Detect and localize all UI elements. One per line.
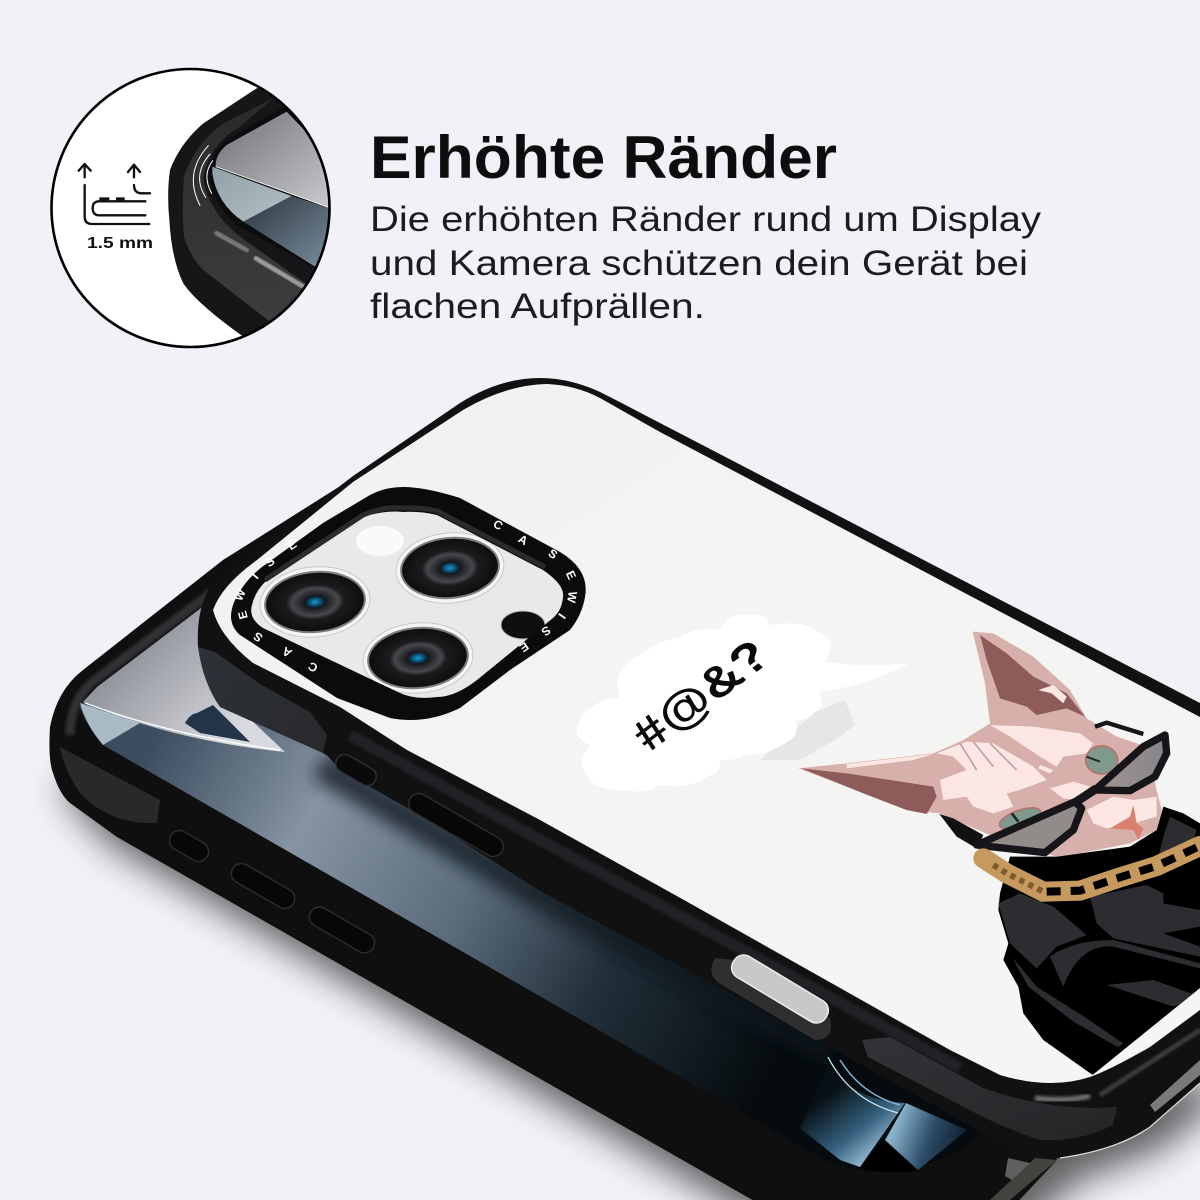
lens 2 — [393, 528, 507, 608]
tongue — [1110, 805, 1143, 840]
front phone: black bumper — [198, 378, 1200, 1158]
ring lettering: S — [251, 629, 265, 645]
back phone: translucent corner — [60, 747, 160, 823]
ring inner bevel — [265, 508, 545, 580]
inset phone corner — [79, 60, 340, 360]
ring lettering: A — [516, 532, 531, 548]
ring lettering: E — [563, 568, 579, 582]
camera module — [231, 487, 586, 720]
camera plate — [249, 510, 565, 700]
ring lettering: C — [305, 659, 320, 675]
flash — [356, 526, 404, 556]
sweater — [998, 807, 1200, 1077]
front phone: speaker port — [1150, 1060, 1200, 1112]
bubble text: #@&? — [620, 631, 781, 759]
front phone: corner highlights — [1035, 1096, 1090, 1100]
1.5 mm label: 1.5 mm — [87, 235, 153, 252]
ring lettering: E — [235, 609, 251, 621]
ring lettering: E — [285, 537, 299, 553]
skin highlights — [847, 685, 1157, 828]
description text: und Kamera schützen dein Gerät bei — [370, 244, 1028, 283]
description text — [370, 200, 1042, 326]
impact arcs — [193, 146, 213, 205]
ring lettering: S — [262, 554, 278, 570]
head — [798, 632, 1162, 857]
inset circle: raised edge detail — [52, 60, 340, 360]
title: Erhöhte Ränder — [370, 124, 837, 191]
gold chain — [983, 846, 1200, 892]
ring lettering: S — [546, 546, 560, 562]
camera ring — [231, 487, 586, 720]
ring lettering: A — [279, 644, 294, 660]
ring lettering: E — [517, 639, 531, 655]
charging port — [711, 951, 832, 1040]
edge height icon — [79, 164, 150, 224]
front phone: translucent corner top left — [198, 647, 327, 753]
eyes — [997, 746, 1118, 833]
back phone: bumper sheen — [70, 590, 215, 735]
ring lettering — [231, 517, 580, 675]
cat illustration — [798, 632, 1200, 1077]
front phone — [198, 378, 1200, 1158]
power button — [405, 790, 507, 860]
inset circle outline — [52, 69, 330, 347]
cloud shadow — [760, 700, 855, 760]
ring lettering: C — [491, 517, 506, 533]
ring lettering: S — [539, 623, 553, 639]
lens 1 — [257, 562, 373, 642]
ring lettering: I — [555, 611, 569, 621]
screen shade under front phone — [320, 765, 830, 1052]
ring lettering: W — [564, 590, 580, 604]
description text: flachen Aufprällen. — [370, 287, 705, 326]
back phone: bumper — [49, 478, 1057, 1200]
screen light streaks — [800, 1062, 905, 1167]
lens 3 — [360, 618, 476, 698]
ring lettering: W — [231, 586, 249, 603]
back phone: screen — [80, 605, 983, 1172]
wrinkles — [960, 742, 1017, 770]
front phone: bumper side sheen — [350, 735, 960, 1068]
microphone hole — [501, 611, 545, 639]
phone shadow — [60, 760, 1200, 1200]
ring lettering: I — [249, 570, 261, 582]
back phone: right edge strip — [990, 1158, 1057, 1200]
back phone: side buttons — [166, 827, 378, 957]
front phone: translucent corner bottom right — [862, 1037, 1117, 1140]
thought bubble — [576, 614, 910, 792]
description text: Die erhöhten Ränder rund um Display — [370, 200, 1042, 239]
back phone: right port — [1005, 1158, 1030, 1180]
collar wedge — [939, 814, 983, 848]
ears — [802, 635, 1085, 814]
front phone: white back face — [213, 384, 1200, 1083]
ringer switch — [332, 751, 380, 789]
sunglasses — [977, 723, 1167, 853]
